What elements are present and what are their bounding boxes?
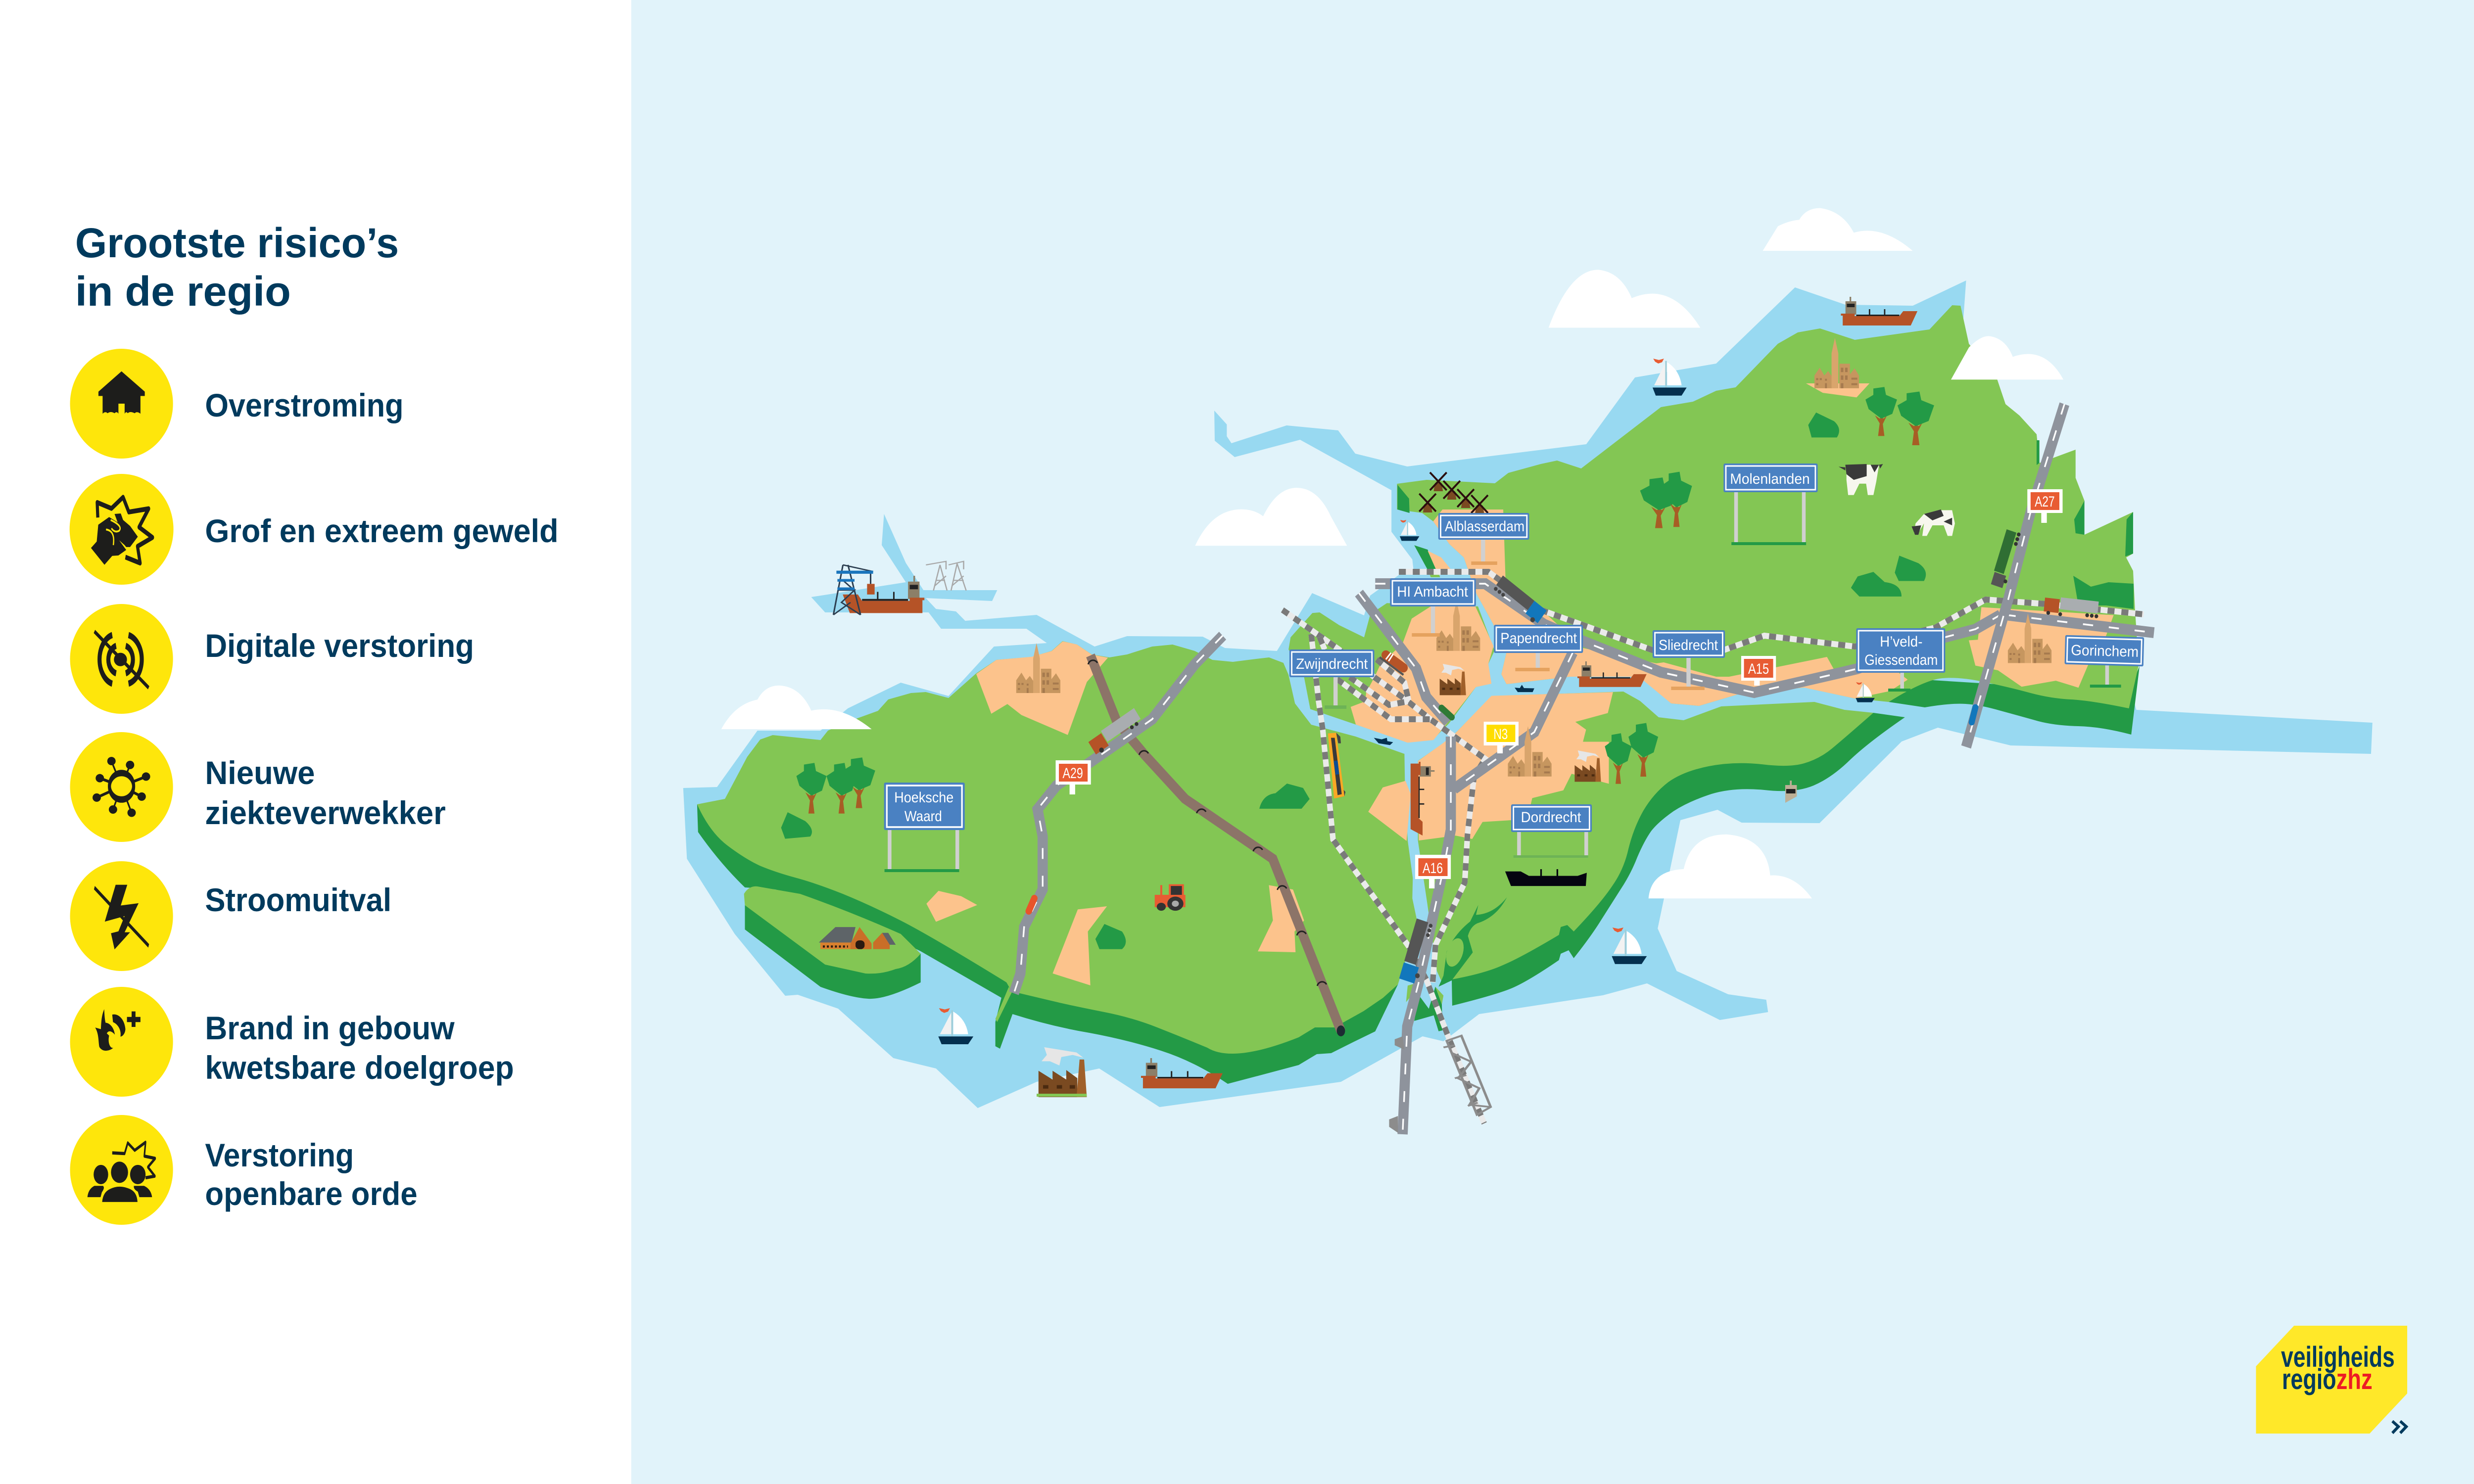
place sign: Papendrecht: Papendrecht (1500, 630, 1577, 647)
road sign: A27 (2027, 489, 2063, 523)
bushes (781, 413, 1926, 949)
heading: Grootste risico's in de regio: Grootste risico’s (75, 220, 399, 267)
place sign: Gorinchem (2065, 635, 2144, 688)
map of the region (683, 208, 2373, 1134)
land: IJsselmonde and Zwijndrecht (1288, 603, 1495, 841)
churches and towns (1016, 338, 2051, 777)
risk item: Nieuwe ziekteverwekker: ziekteverwekker (205, 794, 446, 831)
road sign: N3 (1484, 722, 1519, 753)
road sign: A16: A16 (1423, 860, 1443, 877)
place sign: Dordrecht: Dordrecht (1521, 809, 1581, 826)
risk item: Brand in gebouw kwetsbare doelgroep (70, 987, 514, 1097)
truck: blue with grey trailer on A15 (1492, 575, 1547, 626)
risk item: Nieuwe ziekteverwekker (70, 732, 446, 842)
icon: double chevron (2392, 1421, 2406, 1433)
risk item: Nieuwe ziekteverwekker: Nieuwe (205, 754, 315, 791)
panel: risk legend (0, 0, 631, 1484)
tanker truck (1380, 653, 1403, 675)
pipeline (1088, 655, 1345, 1036)
logo: veiligheidsregio zhz (2256, 1326, 2407, 1434)
road sign: A27: A27 (2035, 494, 2055, 510)
risk item: Brand in gebouw kwetsbare doelgroep: kwetsbare doelgroep (205, 1049, 514, 1086)
road sign: A15: A15 (1748, 661, 1769, 677)
train (1328, 733, 1345, 798)
risk item: Verstoring openbare orde: Verstoring (205, 1137, 354, 1173)
risk item: Overstroming: Overstroming (205, 387, 404, 423)
risk item: Overstroming (70, 349, 404, 459)
place sign: Alblasserdam: Alblasserdam (1445, 518, 1524, 535)
risk item: Stroomuitval: Stroomuitval (205, 881, 391, 918)
truck: red with grey trailer on east road (2044, 596, 2100, 620)
place sign: H'veld-Giessendam (1856, 628, 1945, 692)
truck: red with grey trailer (1088, 708, 1143, 756)
clouds (721, 208, 2063, 898)
risk item: Digitale verstoring (70, 604, 474, 714)
place sign: Hoeksche Waard: Hoeksche (894, 789, 953, 806)
cows (1839, 464, 1955, 536)
place sign: Gorinchem: Gorinchem (2071, 642, 2139, 660)
sailboats (938, 359, 1875, 1044)
risk item: Digitale verstoring: Digitale verstoring (205, 627, 474, 664)
risk item: Verstoring openbare orde (70, 1115, 418, 1225)
creek detail (1406, 897, 1507, 1031)
road sign: A29: A29 (1063, 765, 1083, 782)
land: Eiland van Dordrecht (1406, 692, 1905, 1031)
land: Hoeksche Waard (697, 641, 1418, 1084)
land: Alblasserwaard (1397, 305, 2140, 735)
risk item: Verstoring openbare orde: openbare orde (205, 1175, 418, 1212)
road sign: A15 (1741, 656, 1776, 686)
truck: green on A27 (1990, 528, 2022, 589)
place sign: HI Ambacht (1390, 578, 1476, 637)
risk item: Stroomuitval (70, 861, 391, 971)
cargo ships (843, 297, 1917, 1088)
motorways (1014, 404, 2154, 1134)
windmills (1419, 472, 1488, 514)
water: rivers (683, 280, 2373, 1108)
risk item: Grof en extreem geweld: Grof en extreem geweld (205, 512, 559, 549)
place sign: Molenlanden (1723, 464, 1818, 545)
logo: veiligheidsregio zhz: veiligheids (2281, 1341, 2395, 1373)
place sign: Papendrecht (1494, 625, 1583, 671)
road sign: A29 (1055, 760, 1091, 794)
place sign: Sliedrecht (1653, 630, 1725, 690)
road sign: N3: N3 (1493, 726, 1508, 742)
place sign: Hoeksche Waard: Waard (904, 808, 942, 825)
heading: Grootste risico's in de regio: in de regio (75, 269, 291, 315)
truck: blue with grey trailer on A16 (1399, 919, 1435, 984)
logo: veiligheidsregio zhz: regio (2282, 1363, 2336, 1395)
railway bridge (1443, 1036, 1491, 1115)
place sign: H'veld-Giessendam: H’veld- (1880, 634, 1922, 650)
pylons (926, 561, 966, 591)
railway lines (1283, 572, 2144, 1123)
place sign: Zwijndrecht (1289, 649, 1374, 709)
place sign: Sliedrecht: Sliedrecht (1659, 637, 1718, 653)
place sign: H'veld-Giessendam: Giessendam (1864, 652, 1938, 668)
factories (1037, 664, 1601, 1097)
risk item: Grof en extreem geweld (70, 474, 559, 585)
peach built-up areas: Hoeksche Waard (926, 641, 1304, 985)
logo: veiligheidsregio zhz: zhz (2336, 1363, 2373, 1395)
trees (796, 387, 1934, 814)
place sign: HI Ambacht: HI Ambacht (1397, 584, 1468, 600)
place sign: Zwijndrecht: Zwijndrecht (1296, 656, 1368, 672)
place sign: Hoeksche Waard (884, 783, 965, 872)
harbour crane (833, 565, 875, 615)
risk item: Brand in gebouw kwetsbare doelgroep: Brand in gebouw (205, 1010, 455, 1046)
tractor (1155, 884, 1186, 911)
place sign: Dordrecht (1511, 804, 1592, 858)
farm (819, 927, 896, 949)
place sign: Alblasserdam (1438, 513, 1529, 565)
road sign: A16 (1415, 855, 1451, 888)
heading: Grootste risico's in de regio (75, 220, 399, 315)
place sign: Molenlanden: Molenlanden (1730, 471, 1810, 487)
cars (1029, 707, 1975, 911)
